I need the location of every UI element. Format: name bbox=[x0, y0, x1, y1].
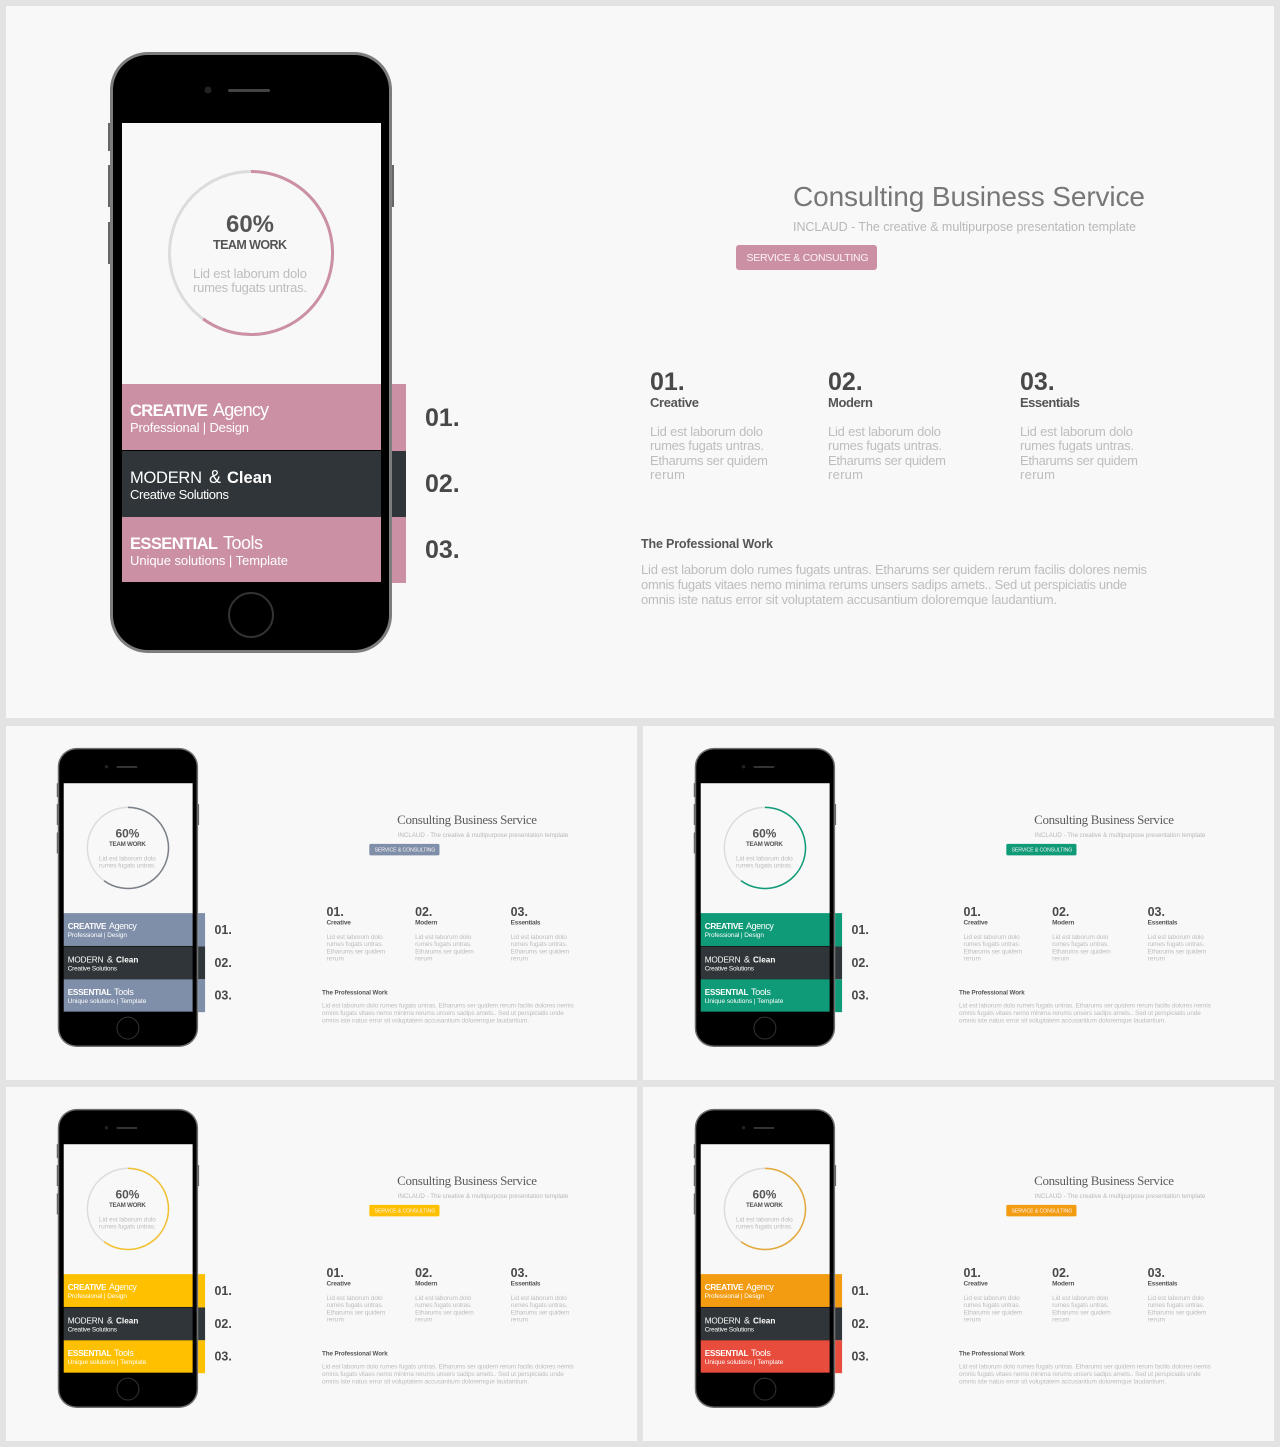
column 02 bbox=[415, 1266, 474, 1323]
column 03: Lid est laborum dolo bbox=[511, 1295, 567, 1302]
band: modern: & bbox=[209, 467, 221, 487]
progress ring 60% bbox=[170, 171, 333, 334]
title: Consulting Business Service bbox=[397, 812, 537, 827]
band: modern: Clean bbox=[116, 1316, 138, 1325]
column 03: rumes fugats untras. bbox=[511, 941, 568, 948]
column 01: Etharums ser quidem bbox=[964, 1309, 1022, 1316]
column 03: Essentials bbox=[1148, 1281, 1178, 1288]
column 02 bbox=[1052, 905, 1111, 962]
band: essential: Unique solutions | Template bbox=[68, 1359, 147, 1366]
band: creative: Professional | Design bbox=[705, 1293, 764, 1300]
subtitle: INCLAUD - The creative & multipurpose presentation template bbox=[1035, 832, 1206, 839]
text block: the professional work: omnis iste natus error sit voluptatem accusantium doloremque laudantium. bbox=[322, 1379, 529, 1386]
side numbers bbox=[215, 1284, 232, 1364]
band: essential: Tools bbox=[751, 1348, 771, 1358]
column 01: rerum bbox=[964, 955, 981, 962]
column 03: rerum bbox=[1020, 467, 1055, 482]
text block: the professional work: Lid est laborum dolo rumes fugats untras. Etharums ser quidem rerum facilis dolores nemis bbox=[641, 562, 1148, 577]
band: creative: Agency bbox=[213, 400, 269, 420]
band: modern: Clean bbox=[227, 469, 272, 487]
slide content: slate bbox=[57, 748, 574, 1047]
column 01: 01. bbox=[650, 368, 685, 396]
column 03 bbox=[1148, 1266, 1206, 1323]
band: essential bbox=[64, 979, 193, 1012]
column 03: rumes fugats untras. bbox=[1148, 1302, 1205, 1309]
band: essential: Tools bbox=[114, 987, 134, 997]
column 03: rumes fugats untras. bbox=[1148, 941, 1205, 948]
band: modern: MODERN bbox=[705, 955, 741, 964]
column 03: Lid est laborum dolo bbox=[1148, 1295, 1204, 1302]
band: essential bbox=[701, 1340, 830, 1373]
band: essential: Unique solutions | Template bbox=[68, 998, 147, 1005]
column 03: Essentials bbox=[1148, 920, 1178, 927]
text block: the professional work: The Professional Work bbox=[959, 1351, 1025, 1358]
band: modern: MODERN bbox=[68, 955, 104, 964]
progress ring 60% bbox=[87, 1168, 169, 1249]
column 02: Modern bbox=[415, 920, 438, 927]
column 03: rumes fugats untras. bbox=[1020, 438, 1134, 453]
column 03: rerum bbox=[511, 1316, 528, 1323]
band: modern: & bbox=[744, 1315, 750, 1325]
band: modern: Creative Solutions bbox=[705, 1326, 754, 1333]
side numbers: 02. bbox=[852, 956, 869, 970]
column 01: rerum bbox=[327, 1316, 344, 1323]
column 01: rerum bbox=[650, 467, 685, 482]
column 01: 01. bbox=[964, 1266, 981, 1280]
band: modern bbox=[64, 1307, 193, 1340]
band: modern: MODERN bbox=[705, 1316, 741, 1325]
column 02: Modern bbox=[1052, 920, 1075, 927]
band: creative: Agency bbox=[746, 1282, 774, 1292]
band: modern bbox=[701, 946, 830, 979]
band: creative: Agency bbox=[109, 921, 137, 931]
text block: the professional work bbox=[322, 990, 574, 1025]
column 02: rumes fugats untras. bbox=[415, 1302, 472, 1309]
progress ring 60%: 60% bbox=[752, 826, 777, 840]
text block: the professional work: omnis iste natus error sit voluptatem accusantium doloremque laudantium. bbox=[959, 1379, 1166, 1386]
band: essential: Tools bbox=[751, 987, 771, 997]
panel: main slide, pink bbox=[6, 6, 1274, 718]
band: modern: & bbox=[744, 954, 750, 964]
band: creative bbox=[64, 1274, 193, 1307]
column 01: Lid est laborum dolo bbox=[327, 1295, 383, 1302]
text block: the professional work: omnis iste natus error sit voluptatem accusantium doloremque laudantium. bbox=[322, 1018, 529, 1025]
band: modern: Clean bbox=[753, 1316, 775, 1325]
column 03: 03. bbox=[1148, 1266, 1165, 1280]
column 03: Etharums ser quidem bbox=[1020, 453, 1138, 468]
band: creative bbox=[701, 1274, 830, 1307]
side numbers: 03. bbox=[425, 536, 460, 564]
band: modern: & bbox=[107, 1315, 113, 1325]
badge bbox=[369, 1205, 439, 1216]
badge bbox=[369, 844, 439, 855]
band: creative: Professional | Design bbox=[68, 932, 127, 939]
band: creative: CREATIVE bbox=[130, 402, 208, 420]
text block: the professional work: omnis iste natus error sit voluptatem accusantium doloremque laudantium. bbox=[641, 592, 1057, 607]
column 01: Lid est laborum dolo bbox=[964, 934, 1020, 941]
progress ring 60%: 60% bbox=[752, 1187, 777, 1201]
progress ring 60% bbox=[724, 807, 806, 888]
column 01: rumes fugats untras. bbox=[964, 1302, 1020, 1309]
column 02: Modern bbox=[1052, 1281, 1075, 1288]
band: creative: Professional | Design bbox=[130, 420, 249, 435]
column 02: rumes fugats untras. bbox=[1052, 941, 1109, 948]
panel: slate variant bbox=[6, 726, 637, 1080]
slide content: orange and red bbox=[694, 1109, 1211, 1408]
band: essential: ESSENTIAL bbox=[130, 535, 218, 553]
badge bbox=[1006, 1205, 1076, 1216]
column 03: Etharums ser quidem bbox=[511, 1309, 569, 1316]
band: essential: ESSENTIAL bbox=[68, 988, 111, 997]
progress ring 60%: rumes fugats untras. bbox=[99, 1223, 156, 1230]
column 02: 02. bbox=[415, 1266, 432, 1280]
column 02: 02. bbox=[1052, 1266, 1069, 1280]
column 02: rumes fugats untras. bbox=[828, 438, 942, 453]
side numbers bbox=[852, 923, 869, 1003]
text block: the professional work: The Professional Work bbox=[641, 537, 773, 551]
text block: the professional work: omnis fugats vitaes nemo minima rerums unsers sadips amets.. Sed ut perspiciatis unde bbox=[641, 577, 1127, 592]
column 02: Lid est laborum dolo bbox=[1052, 934, 1109, 941]
column 02: rumes fugats untras. bbox=[1052, 1302, 1109, 1309]
progress ring 60%: Lid est laborum dolo bbox=[99, 855, 156, 862]
column 02: 02. bbox=[828, 368, 863, 396]
column 03: rerum bbox=[511, 955, 528, 962]
band: modern: Clean bbox=[116, 955, 138, 964]
panel: yellow variant bbox=[6, 1087, 637, 1441]
side numbers: 03. bbox=[852, 1350, 869, 1364]
band: modern: Clean bbox=[753, 955, 775, 964]
badge: SERVICE & CONSULTING bbox=[375, 1208, 435, 1214]
subtitle: INCLAUD - The creative & multipurpose presentation template bbox=[398, 1193, 569, 1200]
column 01: 01. bbox=[327, 905, 344, 919]
side numbers bbox=[215, 923, 232, 1003]
column 03: Essentials bbox=[511, 920, 541, 927]
column 03: 03. bbox=[1148, 905, 1165, 919]
column 02: Etharums ser quidem bbox=[415, 948, 474, 955]
band: essential: Tools bbox=[114, 1348, 134, 1358]
side numbers: 01. bbox=[852, 1284, 869, 1298]
text block: the professional work: The Professional Work bbox=[322, 990, 388, 997]
column 01: Etharums ser quidem bbox=[327, 948, 385, 955]
text block: the professional work: Lid est laborum dolo rumes fugats untras. Etharums ser quidem rerum facilis dolores nemis bbox=[322, 1364, 574, 1371]
band: modern bbox=[122, 451, 381, 517]
band: modern: Creative Solutions bbox=[705, 965, 754, 972]
column 01 bbox=[327, 905, 385, 962]
column 03: Essentials bbox=[1020, 395, 1080, 410]
text block: the professional work: Lid est laborum dolo rumes fugats untras. Etharums ser quidem rerum facilis dolores nemis bbox=[959, 1003, 1211, 1010]
column 03 bbox=[1148, 905, 1206, 962]
side numbers: 03. bbox=[852, 989, 869, 1003]
band: modern bbox=[64, 946, 193, 979]
text block: the professional work: omnis fugats vitaes nemo minima rerums unsers sadips amets.. Sed ut perspiciatis unde bbox=[322, 1371, 564, 1378]
column 02: Lid est laborum dolo bbox=[828, 424, 941, 439]
side numbers: 01. bbox=[215, 923, 232, 937]
column 02: 02. bbox=[1052, 905, 1069, 919]
column 03: 03. bbox=[1020, 368, 1055, 396]
column 01: rumes fugats untras. bbox=[964, 941, 1020, 948]
column 02: Etharums ser quidem bbox=[1052, 1309, 1111, 1316]
progress ring 60%: Lid est laborum dolo bbox=[99, 1216, 156, 1223]
phone mockup bbox=[694, 748, 842, 1047]
title: Consulting Business Service bbox=[397, 1173, 537, 1188]
band: essential: Unique solutions | Template bbox=[130, 553, 288, 568]
column 01 bbox=[327, 1266, 385, 1323]
band: modern: MODERN bbox=[130, 469, 202, 487]
column 01: Etharums ser quidem bbox=[327, 1309, 385, 1316]
band: creative: CREATIVE bbox=[705, 1283, 744, 1292]
progress ring 60%: TEAM WORK bbox=[213, 238, 287, 252]
band: essential: Unique solutions | Template bbox=[705, 998, 784, 1005]
column 02: rerum bbox=[1052, 1316, 1070, 1323]
column 03 bbox=[1020, 368, 1138, 482]
band: creative: CREATIVE bbox=[68, 922, 107, 931]
column 02: rerum bbox=[1052, 955, 1070, 962]
band: creative: CREATIVE bbox=[705, 922, 744, 931]
badge: SERVICE & CONSULTING bbox=[1012, 1208, 1072, 1214]
text block: the professional work: omnis fugats vitaes nemo minima rerums unsers sadips amets.. Sed ut perspiciatis unde bbox=[959, 1010, 1201, 1017]
column 02: Modern bbox=[828, 395, 873, 410]
progress ring 60%: 60% bbox=[115, 826, 140, 840]
badge: SERVICE & CONSULTING bbox=[1012, 847, 1072, 853]
band: modern: Creative Solutions bbox=[68, 965, 117, 972]
column 02: rumes fugats untras. bbox=[415, 941, 472, 948]
column 01: Creative bbox=[650, 395, 699, 410]
side numbers: 01. bbox=[215, 1284, 232, 1298]
phone mockup bbox=[108, 52, 406, 653]
column 02: rerum bbox=[415, 1316, 433, 1323]
side numbers: 02. bbox=[215, 956, 232, 970]
side numbers: 02. bbox=[425, 470, 460, 498]
band: modern: Creative Solutions bbox=[68, 1326, 117, 1333]
band: essential: ESSENTIAL bbox=[705, 988, 748, 997]
band: creative: Agency bbox=[109, 1282, 137, 1292]
band: essential bbox=[122, 517, 381, 582]
badge bbox=[736, 245, 877, 270]
text block: the professional work: Lid est laborum dolo rumes fugats untras. Etharums ser quidem rerum facilis dolores nemis bbox=[322, 1003, 574, 1010]
progress ring 60%: TEAM WORK bbox=[109, 841, 146, 848]
progress ring 60%: Lid est laborum dolo bbox=[736, 1216, 793, 1223]
column 01: Etharums ser quidem bbox=[650, 453, 768, 468]
band: essential: ESSENTIAL bbox=[68, 1349, 111, 1358]
column 03: Lid est laborum dolo bbox=[1148, 934, 1204, 941]
text block: the professional work: omnis iste natus error sit voluptatem accusantium doloremque laudantium. bbox=[959, 1018, 1166, 1025]
text block: the professional work: The Professional Work bbox=[322, 1351, 388, 1358]
column 02 bbox=[415, 905, 474, 962]
column 01: rumes fugats untras. bbox=[327, 1302, 383, 1309]
slide content: yellow bbox=[57, 1109, 574, 1408]
column 01: Etharums ser quidem bbox=[964, 948, 1022, 955]
column 01: rumes fugats untras. bbox=[327, 941, 383, 948]
badge: SERVICE & CONSULTING bbox=[375, 847, 435, 853]
progress ring 60% bbox=[87, 807, 169, 888]
side numbers bbox=[852, 1284, 869, 1364]
side numbers: 02. bbox=[215, 1317, 232, 1331]
text block: the professional work: Lid est laborum dolo rumes fugats untras. Etharums ser quidem rerum facilis dolores nemis bbox=[959, 1364, 1211, 1371]
band: essential: ESSENTIAL bbox=[705, 1349, 748, 1358]
progress ring 60% bbox=[724, 1168, 806, 1249]
progress ring 60%: rumes fugats untras. bbox=[99, 862, 156, 869]
column 01: 01. bbox=[964, 905, 981, 919]
column 01: Creative bbox=[964, 920, 988, 927]
column 01: rerum bbox=[327, 955, 344, 962]
band: creative: Professional | Design bbox=[705, 932, 764, 939]
column 03: 03. bbox=[511, 1266, 528, 1280]
column 02 bbox=[828, 368, 946, 482]
column 01: Creative bbox=[964, 1281, 988, 1288]
band: essential: Unique solutions | Template bbox=[705, 1359, 784, 1366]
band: modern: MODERN bbox=[68, 1316, 104, 1325]
band: creative bbox=[64, 913, 193, 946]
column 02: Lid est laborum dolo bbox=[415, 1295, 472, 1302]
band: essential bbox=[701, 979, 830, 1012]
column 03: rerum bbox=[1148, 1316, 1165, 1323]
side numbers: 02. bbox=[852, 1317, 869, 1331]
badge: SERVICE & CONSULTING bbox=[746, 252, 868, 264]
column 02: Etharums ser quidem bbox=[1052, 948, 1111, 955]
progress ring 60%: rumes fugats untras. bbox=[736, 1223, 793, 1230]
text block: the professional work bbox=[959, 990, 1211, 1025]
column 01: 01. bbox=[327, 1266, 344, 1280]
progress ring 60%: rumes fugats untras. bbox=[736, 862, 793, 869]
text block: the professional work bbox=[322, 1351, 574, 1386]
side numbers bbox=[425, 404, 460, 564]
column 03: rumes fugats untras. bbox=[511, 1302, 568, 1309]
column 01: Lid est laborum dolo bbox=[964, 1295, 1020, 1302]
band: essential bbox=[64, 1340, 193, 1373]
column 02: rerum bbox=[415, 955, 433, 962]
side numbers: 01. bbox=[852, 923, 869, 937]
band: creative: CREATIVE bbox=[68, 1283, 107, 1292]
column 01: Creative bbox=[327, 1281, 351, 1288]
column 02: Lid est laborum dolo bbox=[415, 934, 472, 941]
column 01 bbox=[964, 905, 1022, 962]
text block: the professional work: omnis fugats vitaes nemo minima rerums unsers sadips amets.. Sed ut perspiciatis unde bbox=[959, 1371, 1201, 1378]
column 01 bbox=[650, 368, 768, 482]
slide content: green bbox=[694, 748, 1211, 1047]
column 02: rerum bbox=[828, 467, 863, 482]
column 01: rumes fugats untras. bbox=[650, 438, 764, 453]
band: creative bbox=[701, 913, 830, 946]
phone mockup bbox=[57, 1109, 205, 1408]
band: modern: Creative Solutions bbox=[130, 487, 230, 502]
column 03: Etharums ser quidem bbox=[1148, 1309, 1206, 1316]
progress ring 60%: rumes fugats untras. bbox=[193, 280, 307, 295]
band: creative: Agency bbox=[746, 921, 774, 931]
band: creative bbox=[122, 384, 381, 450]
subtitle: INCLAUD - The creative & multipurpose presentation template bbox=[1035, 1193, 1206, 1200]
column 02 bbox=[1052, 1266, 1111, 1323]
column 02: Lid est laborum dolo bbox=[1052, 1295, 1109, 1302]
column 02: Modern bbox=[415, 1281, 438, 1288]
side numbers: 03. bbox=[215, 989, 232, 1003]
text block: the professional work: The Professional Work bbox=[959, 990, 1025, 997]
subtitle: INCLAUD - The creative & multipurpose presentation template bbox=[793, 220, 1136, 234]
column 01: rerum bbox=[964, 1316, 981, 1323]
column 02: Etharums ser quidem bbox=[415, 1309, 474, 1316]
progress ring 60%: Lid est laborum dolo bbox=[736, 855, 793, 862]
side numbers: 03. bbox=[215, 1350, 232, 1364]
column 01 bbox=[964, 1266, 1022, 1323]
column 01: Lid est laborum dolo bbox=[650, 424, 763, 439]
progress ring 60%: TEAM WORK bbox=[746, 1202, 783, 1209]
title: Consulting Business Service bbox=[793, 181, 1145, 212]
panel: green variant bbox=[643, 726, 1274, 1080]
band: essential: Tools bbox=[223, 533, 263, 553]
progress ring 60%: 60% bbox=[226, 211, 274, 238]
column 01: Lid est laborum dolo bbox=[327, 934, 383, 941]
progress ring 60%: Lid est laborum dolo bbox=[193, 266, 307, 281]
column 03: Etharums ser quidem bbox=[511, 948, 569, 955]
title: Consulting Business Service bbox=[1034, 1173, 1174, 1188]
column 03 bbox=[511, 905, 569, 962]
band: modern: & bbox=[107, 954, 113, 964]
column 03: Lid est laborum dolo bbox=[1020, 424, 1133, 439]
text block: the professional work: omnis fugats vitaes nemo minima rerums unsers sadips amets.. Sed ut perspiciatis unde bbox=[322, 1010, 564, 1017]
side numbers: 01. bbox=[425, 404, 460, 432]
column 03: 03. bbox=[511, 905, 528, 919]
band: modern bbox=[701, 1307, 830, 1340]
column 03: rerum bbox=[1148, 955, 1165, 962]
column 03: Etharums ser quidem bbox=[1148, 948, 1206, 955]
band: creative: Professional | Design bbox=[68, 1293, 127, 1300]
progress ring 60%: 60% bbox=[115, 1187, 140, 1201]
text block: the professional work bbox=[959, 1351, 1211, 1386]
badge bbox=[1006, 844, 1076, 855]
text block: the professional work bbox=[641, 537, 1148, 607]
column 03 bbox=[511, 1266, 569, 1323]
phone mockup bbox=[57, 748, 205, 1047]
column 02: 02. bbox=[415, 905, 432, 919]
column 03: Essentials bbox=[511, 1281, 541, 1288]
progress ring 60%: TEAM WORK bbox=[746, 841, 783, 848]
column 02: Etharums ser quidem bbox=[828, 453, 946, 468]
panel: orange and red variant bbox=[643, 1087, 1274, 1441]
title: Consulting Business Service bbox=[1034, 812, 1174, 827]
subtitle: INCLAUD - The creative & multipurpose presentation template bbox=[398, 832, 569, 839]
phone mockup bbox=[694, 1109, 842, 1408]
column 03: Lid est laborum dolo bbox=[511, 934, 567, 941]
progress ring 60%: TEAM WORK bbox=[109, 1202, 146, 1209]
column 01: Creative bbox=[327, 920, 351, 927]
